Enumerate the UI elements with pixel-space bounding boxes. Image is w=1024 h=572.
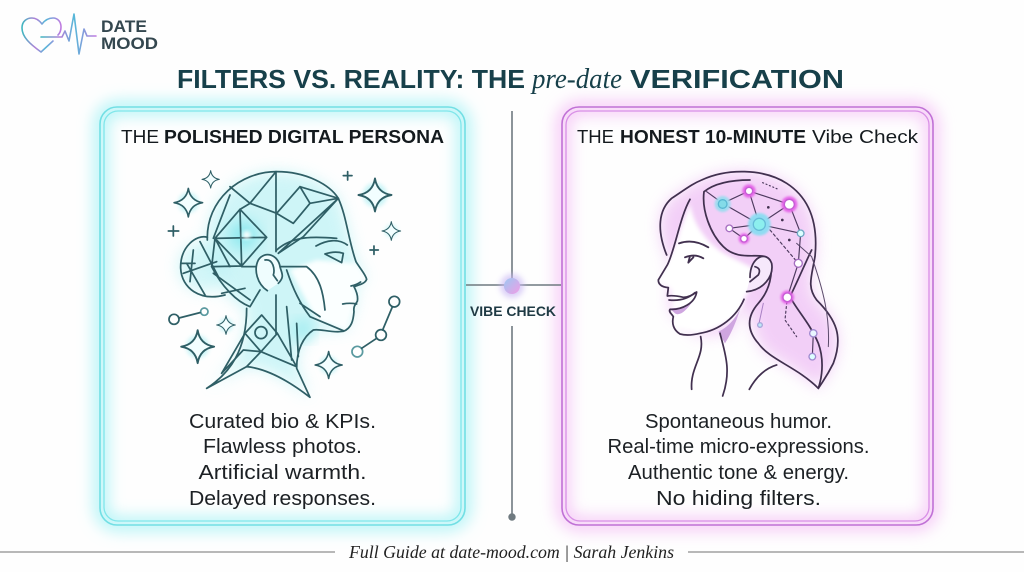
- panel body text: [189, 410, 376, 510]
- panel body text: Flawless photos.: [203, 435, 362, 458]
- vibe check label: VIBE CHECK: [470, 303, 556, 319]
- logo wordmark: DATE: [101, 17, 147, 36]
- panel heading: POLISHED DIGITAL PERSONA: [164, 126, 444, 147]
- icon: heart with pulse line: [22, 14, 96, 54]
- illustration: geometric head: [168, 171, 401, 397]
- illustration: woman profile with constellation: [658, 172, 838, 396]
- glowing orb: [500, 274, 524, 298]
- panel: polished digital persona: [100, 107, 465, 525]
- panel: honest 10-minute vibe check: [562, 107, 933, 525]
- panel heading: HONEST 10-MINUTE: [620, 126, 806, 147]
- panel body text: No hiding filters.: [656, 487, 821, 510]
- logo: [22, 14, 158, 54]
- logo wordmark: MOOD: [101, 34, 158, 53]
- title: pre-date: [530, 64, 622, 95]
- panel body text: Curated bio & KPIs.: [189, 410, 376, 433]
- panel body text: Real-time micro-expressions.: [608, 435, 870, 458]
- panel body text: Authentic tone & energy.: [628, 461, 849, 484]
- vibe check divider: [466, 111, 561, 521]
- panel body text: Delayed responses.: [189, 487, 376, 510]
- panel heading: [577, 126, 919, 147]
- panel heading: THE: [121, 126, 159, 147]
- panel heading: THE: [577, 126, 614, 147]
- title: [177, 64, 844, 95]
- title: VERIFICATION: [630, 64, 844, 94]
- title: FILTERS VS. REALITY: THE: [177, 64, 525, 94]
- panel body text: Spontaneous humor.: [645, 410, 832, 433]
- footer credit: Full Guide at date-mood.com | Sarah Jenkins: [348, 542, 674, 562]
- panel body text: Artificial warmth.: [198, 461, 366, 484]
- panel body text: [608, 410, 870, 510]
- logo wordmark: [101, 17, 158, 53]
- panel heading: Vibe Check: [812, 126, 919, 147]
